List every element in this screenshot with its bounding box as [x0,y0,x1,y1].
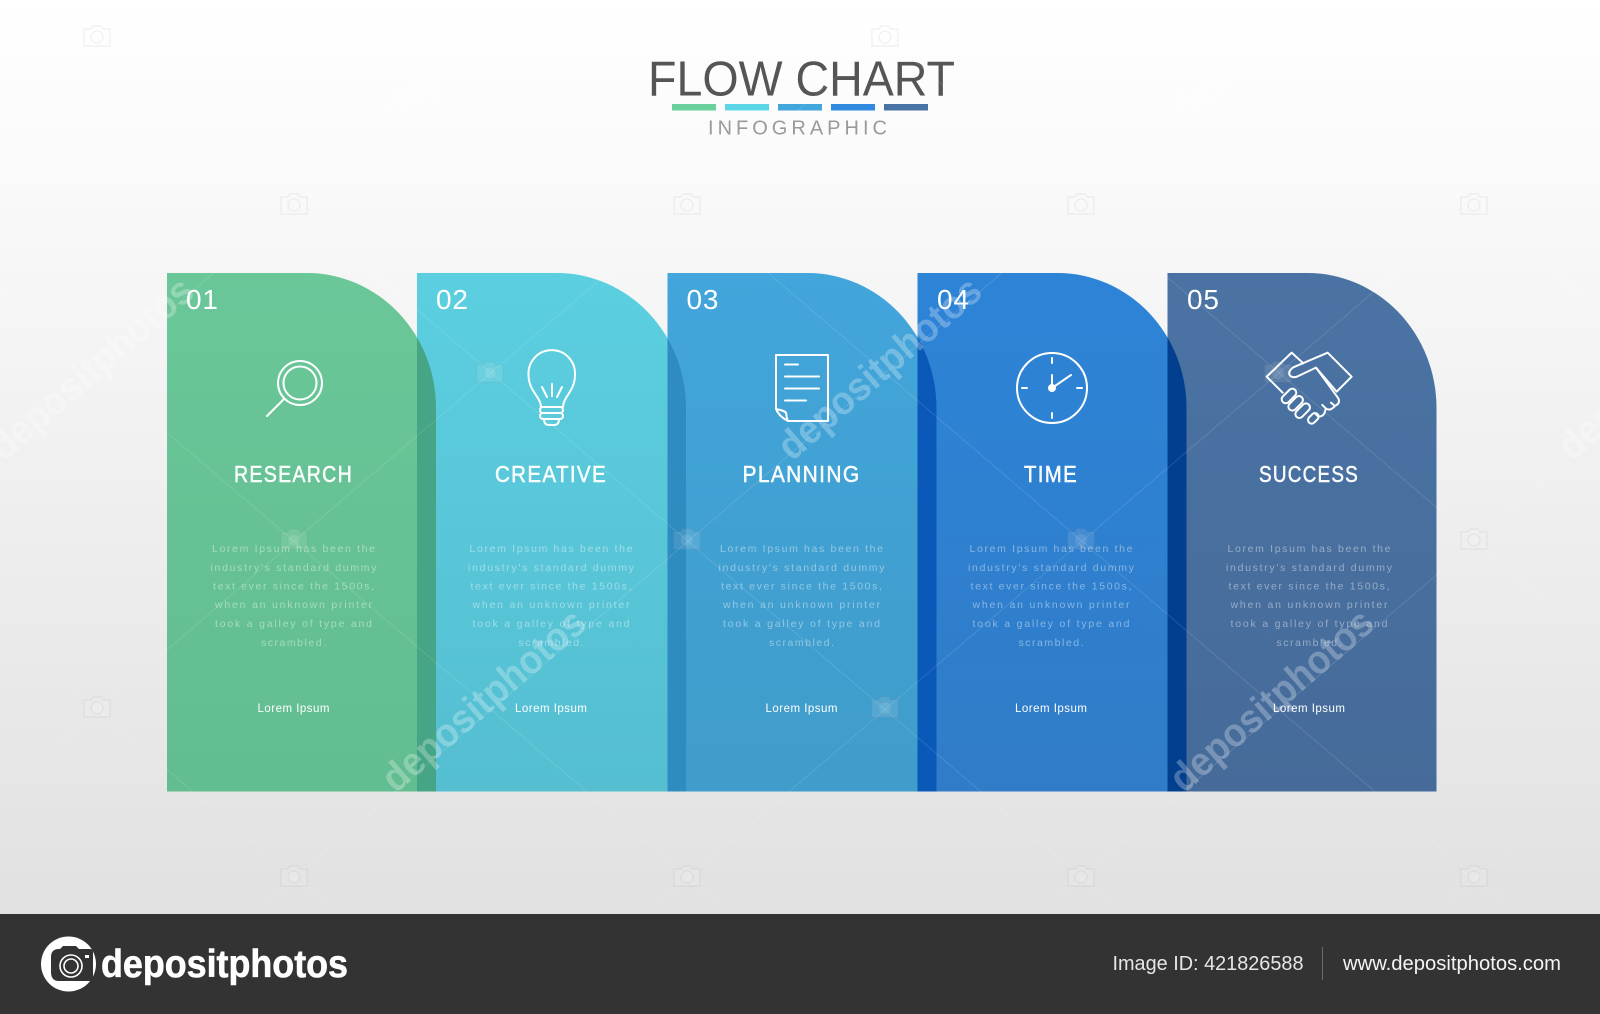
panel: 02 creative [417,273,668,792]
body text: scrambled. [1018,637,1084,649]
icon: light bulb [528,350,575,425]
body text: took a galley of type and [723,618,880,630]
step number: 04 [937,284,969,315]
heading: TIME [1024,461,1078,487]
body text: industry's standard dummy [718,562,885,574]
watermark text: depositphotos [769,268,990,469]
subtitle: INFOGRAPHIC: INFOGRAPHIC [708,118,887,140]
watermark text: depositphotos [373,600,594,801]
body text: Lorem Ipsum has been the [970,543,1133,555]
body text: scrambled. [261,637,326,649]
body text: when an unknown printer [722,599,880,611]
step number: 05 [1187,284,1219,315]
body text: took a galley of type and [972,618,1130,630]
icon: handshake [1267,353,1352,425]
heading: RESEARCH [234,461,353,487]
card shape [417,273,686,792]
panel: 03 planning [668,273,918,792]
body text: industry's standard dummy [1226,562,1393,574]
separator [1322,947,1323,980]
card shape [167,273,436,792]
watermark text: depositphotos [1161,600,1382,801]
icon: document [776,355,828,421]
body text: text ever since the 1500s, [970,580,1132,592]
overlap shade [1168,338,1186,792]
icon: clock [1017,353,1087,423]
panel: 04 time [918,273,1168,792]
body text [210,543,377,649]
step number: 01 [186,284,218,315]
step number: 03 [686,284,718,315]
watermark text [0,0,1600,801]
body text: Lorem Ipsum has been the [470,543,633,555]
footer bar [0,914,1600,1014]
body text: when an unknown printer [472,599,630,611]
heading: PLANNING [742,461,860,487]
body text: text ever since the 1500s, [213,580,374,592]
body text: Lorem Ipsum has been the [212,543,375,555]
logo: wordmark: depositphotos [101,943,348,986]
body text: took a galley of type and [1230,618,1388,630]
body text: Lorem Ipsum has been the [1228,543,1391,555]
card shape [918,273,1186,792]
body text: text ever since the 1500s, [721,580,882,592]
heading: SUCCESS [1259,461,1359,487]
body text: industry's standard dummy [968,562,1135,574]
body text: text ever since the 1500s, [1228,580,1390,592]
body text [718,543,885,649]
body text: when an unknown printer [972,599,1130,611]
link: Lorem Ipsum [515,703,587,715]
link: Lorem Ipsum [258,703,330,715]
body text: scrambled. [518,637,584,649]
link: Lorem Ipsum [766,703,838,715]
card shape [1168,273,1436,792]
body text: industry's standard dummy [210,562,377,574]
body text: text ever since the 1500s, [470,580,632,592]
title: FLOW CHART: FLOW CHART [648,52,955,106]
body text: when an unknown printer [214,599,372,611]
panel: 01 research [167,273,436,792]
image id: Image ID: 421826588 [1112,952,1304,975]
step number: 02 [436,284,468,315]
body text [1226,543,1393,649]
title block [648,52,955,140]
panel: 05 success [1168,273,1436,792]
website: www.depositphotos.com [1342,952,1561,975]
overlap shade [918,338,936,792]
body text: took a galley of type and [472,618,630,630]
heading: CREATIVE [495,461,607,487]
logo: camera badge [41,936,96,992]
overlap shade [668,338,686,792]
body text [968,543,1135,649]
card shape [668,273,936,792]
overlap shade [417,338,436,792]
body text: when an unknown printer [1230,599,1388,611]
body text: took a galley of type and [215,618,372,630]
body text: industry's standard dummy [468,562,635,574]
body text [468,543,635,649]
icon: magnifier [267,361,322,416]
colour strip [672,104,928,110]
body text: Lorem Ipsum has been the [720,543,883,555]
link: Lorem Ipsum [1273,703,1345,715]
body text: scrambled. [1276,637,1342,649]
link: Lorem Ipsum [1015,703,1087,715]
watermark cameras [84,26,1487,886]
body text: scrambled. [769,637,834,649]
